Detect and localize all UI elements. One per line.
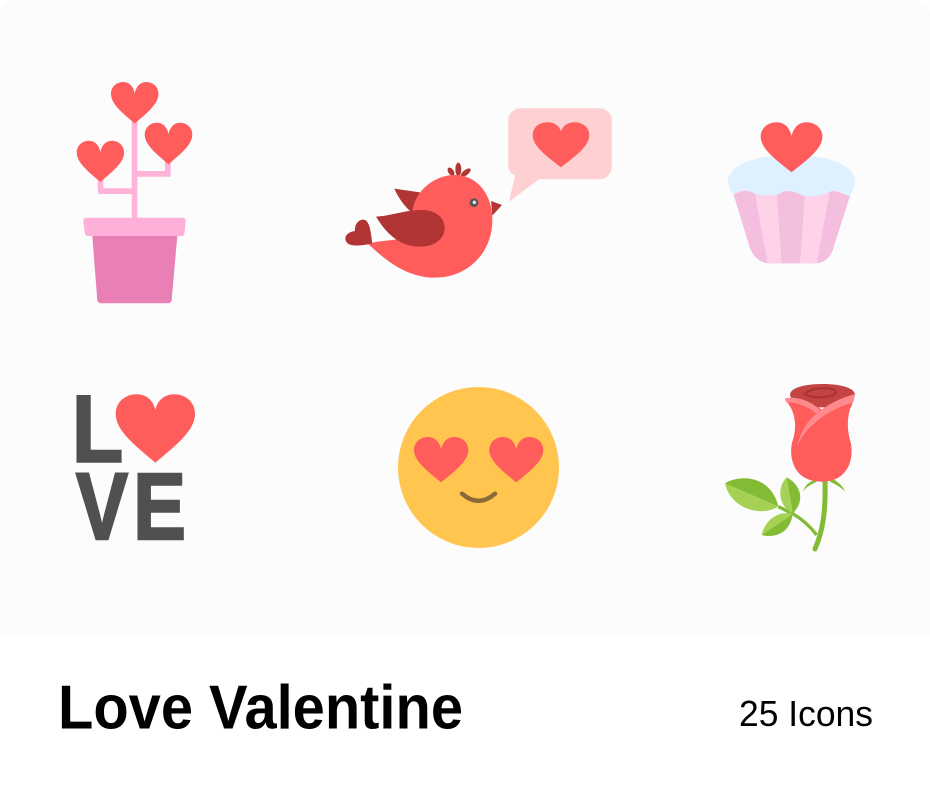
icon: LOVE lettering with heart: E — [133, 454, 186, 560]
bubble heart — [533, 122, 589, 167]
title: Love Valentine — [58, 673, 463, 742]
icon: rose — [725, 384, 855, 549]
icon: cupcake with heart — [728, 122, 855, 263]
icon: bird with speech bubble — [345, 108, 612, 278]
speech bubble — [508, 108, 612, 202]
bird — [345, 163, 502, 278]
icon: LOVE lettering with heart — [72, 376, 195, 560]
icon count label: 25 Icons — [739, 693, 873, 734]
icon: heart-eyes emoji — [398, 387, 559, 548]
icon: LOVE lettering with heart: L — [72, 376, 123, 482]
icon: LOVE lettering with heart: V — [76, 454, 128, 560]
icon: heart plant in pot — [77, 82, 192, 303]
